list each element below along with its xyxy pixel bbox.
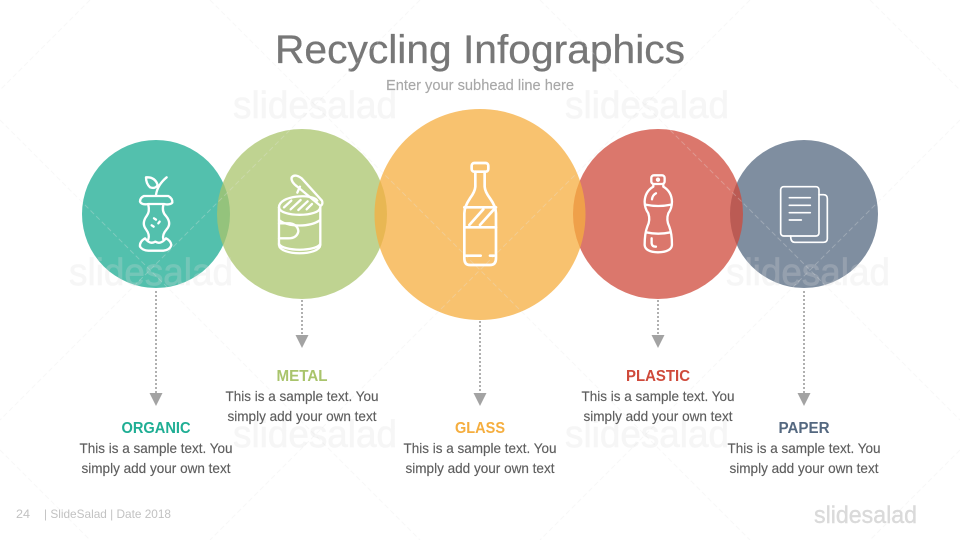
text block: glass: simply add your own text (406, 460, 555, 476)
icon: apple core (140, 177, 172, 251)
icon: tin can (279, 176, 322, 253)
arrow: organic (150, 291, 162, 406)
text: slidesalad (565, 414, 729, 456)
icon: paper documents (781, 187, 827, 242)
arrow: paper (798, 291, 810, 406)
footer: 24 (16, 507, 30, 521)
icon: plastic bottle (645, 175, 672, 252)
text block: plastic: PLASTIC (626, 368, 690, 385)
text block: plastic: This is a sample text. You (582, 388, 734, 404)
text: slidesalad (233, 414, 397, 456)
arrow: plastic (652, 300, 664, 348)
arrow: metal (296, 300, 308, 348)
text block: glass (404, 420, 556, 476)
footer logo: slidesalad (814, 502, 917, 529)
text block: metal: simply add your own text (228, 408, 377, 424)
text block: paper: This is a sample text. You (728, 440, 880, 456)
text block: paper: simply add your own text (730, 460, 879, 476)
text block: organic: This is a sample text. You (80, 440, 232, 456)
text: slidesalad (233, 85, 397, 127)
text: slidesalad (69, 252, 233, 294)
text block: paper: PAPER (778, 420, 830, 437)
text block: organic: ORGANIC (122, 420, 191, 437)
subhead: Enter your subhead line here (386, 77, 574, 94)
text: slidesalad (565, 85, 729, 127)
circle row (82, 109, 878, 320)
icon: glass bottle (464, 163, 496, 265)
text block: metal (226, 368, 378, 424)
footer: | SlideSalad | Date 2018 (44, 507, 171, 521)
text block: organic (80, 420, 232, 476)
text block: paper (728, 420, 880, 476)
text block: metal: METAL (276, 368, 328, 385)
text block: metal: This is a sample text. You (226, 388, 378, 404)
arrow: glass (474, 321, 486, 406)
text block: glass: This is a sample text. You (404, 440, 556, 456)
text block: organic: simply add your own text (82, 460, 231, 476)
text: slidesalad (726, 252, 890, 294)
text block: plastic (582, 368, 734, 424)
text block: plastic: simply add your own text (584, 408, 733, 424)
text block: glass: GLASS (455, 420, 505, 437)
title: Recycling Infographics (275, 28, 685, 72)
